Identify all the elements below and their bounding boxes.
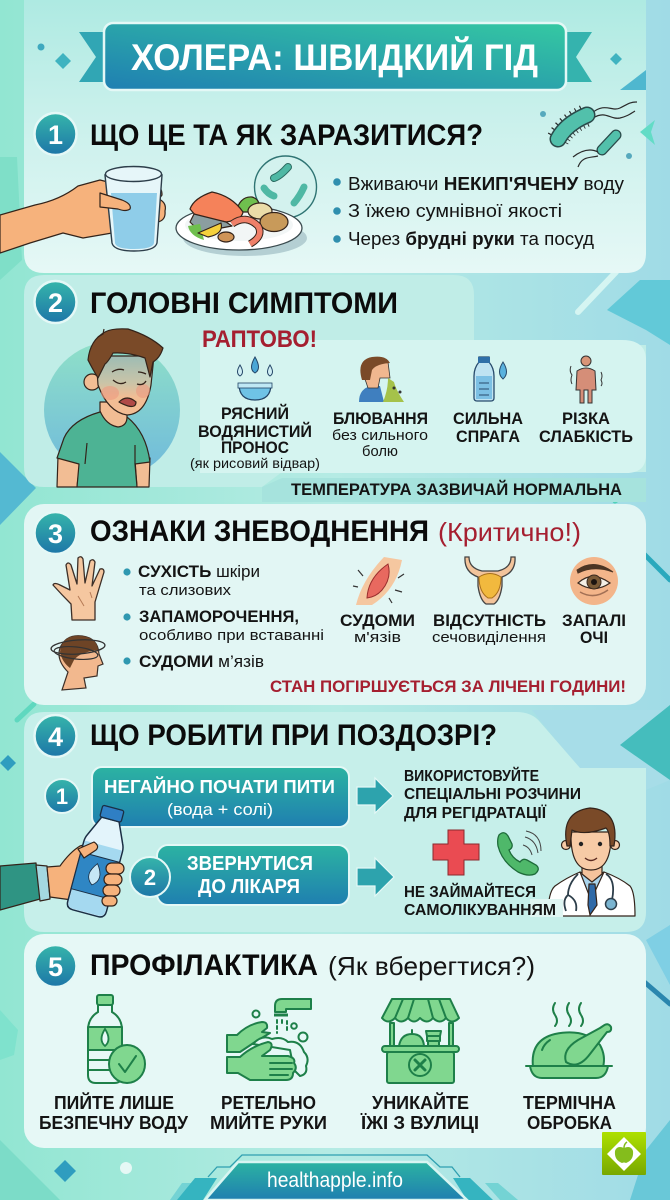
sign: muscle cramps: м'язів xyxy=(354,629,401,646)
prevention: avoid street food: ЇЖІ З ВУЛИЦІ xyxy=(360,1113,479,1133)
prevention: avoid street food xyxy=(360,999,479,1133)
text: use rehydration solutions xyxy=(404,767,581,822)
symptom: strong thirst xyxy=(453,357,523,446)
symptom: watery diarrhea: РЯСНИЙ xyxy=(221,404,289,423)
section 2 number badge: 2 xyxy=(48,288,63,318)
symptom: watery diarrhea: ПРОНОС xyxy=(221,438,289,457)
prevention: drink safe water xyxy=(39,995,189,1133)
warning: condition worsens: СТАН ПОГІРШУЄТЬСЯ ЗА ЛІЧЕНІ ГОДИНИ! xyxy=(270,677,626,696)
illustration: doctor xyxy=(548,808,635,916)
prevention: heat treatment xyxy=(523,1003,616,1133)
step 1 badge xyxy=(45,779,79,813)
alert: suddenly: РАПТОВО! xyxy=(202,326,317,353)
prevention: heat treatment: ОБРОБКА xyxy=(527,1113,612,1133)
arrow: step 1 xyxy=(357,778,393,813)
panel: signs of dehydration xyxy=(24,504,646,705)
symptom: sudden weakness xyxy=(539,356,633,446)
symptom: vomiting: БЛЮВАННЯ xyxy=(333,409,428,428)
panel: main symptoms xyxy=(24,275,646,502)
section 1 number badge xyxy=(34,113,76,155)
icon: dizzy head xyxy=(51,636,105,690)
step 1 button: (вода + солі) xyxy=(167,801,273,819)
icon: hand holding water bottle xyxy=(0,803,133,918)
prevention: wash hands: РЕТЕЛЬНО xyxy=(221,1093,316,1113)
prevention: wash hands: МИЙТЕ РУКИ xyxy=(210,1112,327,1133)
sign: muscle cramps xyxy=(340,557,415,646)
footer website banner: healthapple.info xyxy=(267,1169,403,1192)
step 1 button: НЕГАЙНО ПОЧАТИ ПИТИ xyxy=(104,776,335,797)
symptom: strong thirst: СПРАГА xyxy=(456,427,520,446)
section 5 number badge xyxy=(34,945,76,987)
text: use rehydration solutions: ДЛЯ РЕГІДРАТАЦІЇ xyxy=(404,805,547,822)
prevention: avoid street food: УНИКАЙТЕ xyxy=(372,1092,469,1113)
bullet list: dehydration signs: та слизових xyxy=(139,582,232,599)
symptom: strong thirst: СИЛЬНА xyxy=(453,409,523,428)
bullet list: routes of infection xyxy=(333,174,624,249)
panel: what to do if suspected xyxy=(0,712,646,932)
panel: what is it and how to get infected xyxy=(0,0,655,273)
section 3 number badge xyxy=(34,512,76,554)
sign: no urination xyxy=(432,557,546,646)
sign: sunken eyes: ОЧІ xyxy=(580,628,608,647)
logo badge xyxy=(602,1132,646,1175)
heading: section 3: (Критично!) xyxy=(438,517,581,547)
step 2 badge xyxy=(130,857,170,897)
symptom: vomiting: болю xyxy=(362,444,398,460)
icon: food plate with bacteria xyxy=(176,156,316,256)
title banner xyxy=(79,23,592,90)
symptom: watery diarrhea: (як рисовий відвар) xyxy=(190,456,320,471)
text: use rehydration solutions: СПЕЦІАЛЬНІ РОЗЧИНИ xyxy=(404,786,581,803)
prevention: drink safe water: БЕЗПЕЧНУ ВОДУ xyxy=(39,1113,189,1133)
bullet list: dehydration signs xyxy=(123,562,324,671)
sign: muscle cramps: СУДОМИ xyxy=(340,611,415,630)
inner symptoms area xyxy=(200,340,646,473)
arrow: step 2 xyxy=(357,858,394,896)
symptom: sudden weakness: СЛАБКІСТЬ xyxy=(539,427,633,446)
step 2 button xyxy=(157,845,349,905)
panel: prevention xyxy=(24,934,646,1148)
symptom: watery diarrhea: ВОДЯНИСТИЙ xyxy=(198,422,312,441)
illustration: sick person xyxy=(44,329,180,487)
heading: section 3: ОЗНАКИ ЗНЕВОДНЕННЯ xyxy=(90,515,429,548)
sign: sunken eyes: ЗАПАЛІ xyxy=(562,611,626,630)
heading: section 5: (Як вберегтися?) xyxy=(328,951,535,981)
icon: hand holding glass of water xyxy=(0,166,165,253)
text: do not self-medicate: НЕ ЗАЙМАЙТЕСЯ xyxy=(404,883,536,901)
section 5 number badge: 5 xyxy=(48,952,63,982)
bullet list: routes of infection: Через брудні руки та посуд xyxy=(348,229,595,249)
icon: dry hand xyxy=(53,557,104,620)
symptom: vomiting: без сильного xyxy=(332,428,428,444)
prevention: wash hands xyxy=(210,999,327,1133)
section 4 number badge: 4 xyxy=(48,722,63,752)
icon: bacteria xyxy=(540,102,637,167)
text: use rehydration solutions: ВИКОРИСТОВУЙТЕ xyxy=(404,767,539,785)
heading: section 2: ГОЛОВНІ СИМПТОМИ xyxy=(90,287,398,320)
icon: medical cross xyxy=(433,830,479,875)
bullet list: dehydration signs: СУДОМИ м’язів xyxy=(139,652,264,671)
icon: phone xyxy=(498,831,541,875)
section 4 number badge xyxy=(34,715,76,757)
sign: sunken eyes xyxy=(562,557,626,647)
prevention: heat treatment: ТЕРМІЧНА xyxy=(523,1093,616,1113)
bullet list: dehydration signs: особливо при вставанні xyxy=(139,627,324,644)
sign: no urination: сечовиділення xyxy=(432,629,546,646)
step 1 button xyxy=(92,767,349,827)
section 3 number badge: 3 xyxy=(48,519,63,549)
step 1 badge: 1 xyxy=(56,784,68,809)
prevention: drink safe water: ПИЙТЕ ЛИШЕ xyxy=(54,1092,174,1113)
symptom: sudden weakness: РІЗКА xyxy=(562,409,610,428)
bullet list: routes of infection: З їжею сумнівної якості xyxy=(348,201,562,221)
step 2 button: ЗВЕРНУТИСЯ xyxy=(187,853,313,875)
section 2 number badge xyxy=(34,281,76,323)
symptom: vomiting xyxy=(332,357,428,460)
bullet list: dehydration signs: ЗАПАМОРОЧЕННЯ, xyxy=(139,607,299,626)
step 2 button: ДО ЛІКАРЯ xyxy=(198,876,300,898)
text: do not self-medicate: САМОЛІКУВАННЯМ xyxy=(404,902,556,919)
note: temperature: ТЕМПЕРАТУРА ЗАЗВИЧАЙ НОРМАЛЬНА xyxy=(291,480,622,499)
heading: section 1: ЩО ЦЕ ТА ЯК ЗАРАЗИТИСЯ? xyxy=(90,119,483,152)
heading: section 5: ПРОФІЛАКТИКА xyxy=(90,949,318,982)
footer website banner xyxy=(170,1155,518,1200)
bullet list: routes of infection: Вживаючи НЕКИП'ЯЧЕНУ воду xyxy=(348,174,624,194)
heading: section 4: ЩО РОБИТИ ПРИ ПОЗДОЗРІ? xyxy=(90,719,497,752)
symptom: watery diarrhea xyxy=(190,357,320,471)
step 2 badge: 2 xyxy=(144,865,156,890)
section 1 number badge: 1 xyxy=(48,120,63,150)
title banner: ХОЛЕРА: ШВИДКИЙ ГІД xyxy=(131,36,538,78)
bullet list: dehydration signs: СУХІСТЬ шкіри xyxy=(138,562,260,581)
text: do not self-medicate xyxy=(404,883,563,919)
sign: no urination: ВІДСУТНІСТЬ xyxy=(433,611,546,630)
heading: section 5 xyxy=(90,949,535,982)
